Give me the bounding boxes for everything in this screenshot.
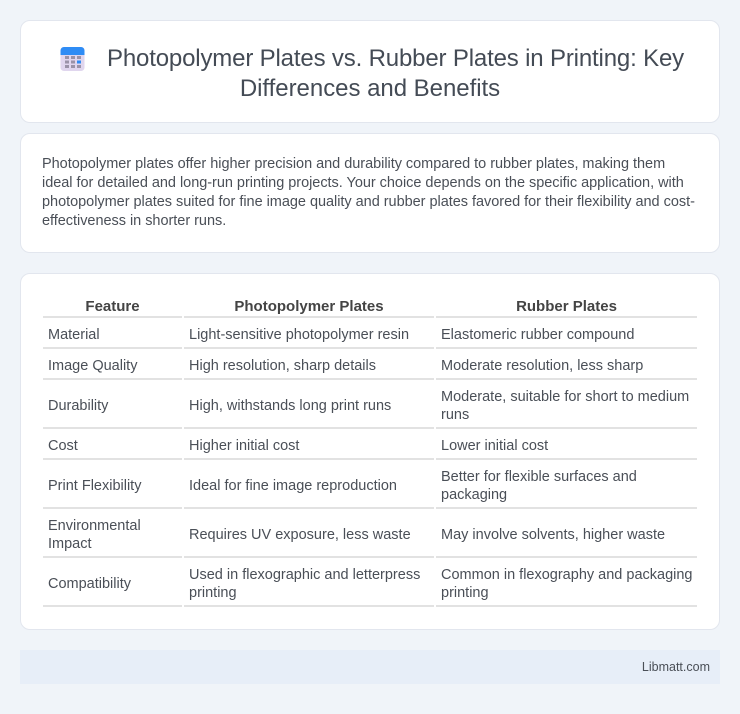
title: Photopolymer Plates vs. Rubber Plates in Printing: Key <box>107 45 684 72</box>
table rows: Durability <box>48 398 108 414</box>
icon: calendar <box>60 47 84 71</box>
table header: Feature <box>85 298 140 315</box>
intro text: Photopolymer plates offer higher precision and durability compared to rubber plates, making them <box>42 156 665 172</box>
table rows: High resolution, sharp details <box>189 358 376 374</box>
table header <box>43 298 697 318</box>
intro text <box>42 156 695 229</box>
table rows: May involve solvents, higher waste <box>441 527 665 543</box>
table rows: Requires UV exposure, less waste <box>189 527 411 543</box>
table rows: Moderate, suitable for short to medium <box>441 389 689 405</box>
table rows: Impact <box>48 536 92 552</box>
table rows: Print Flexibility <box>48 478 141 494</box>
panel: introduction <box>20 133 720 253</box>
comparison table <box>43 298 697 607</box>
footer bar <box>20 650 720 684</box>
table rows: Lower initial cost <box>441 438 548 454</box>
table header: Rubber Plates <box>516 298 617 315</box>
table rows: Common in flexography and packaging <box>441 567 692 583</box>
title: Differences and Benefits <box>240 75 500 102</box>
table rows: printing <box>441 585 489 601</box>
table rows: Image Quality <box>48 358 137 374</box>
table rows: Moderate resolution, less sharp <box>441 358 643 374</box>
table rows: High, withstands long print runs <box>189 398 391 414</box>
table rows: Ideal for fine image reproduction <box>189 478 397 494</box>
table rows: Higher initial cost <box>189 438 299 454</box>
table rows: runs <box>441 407 469 423</box>
table rows: printing <box>189 585 237 601</box>
table rows: Used in flexographic and letterpress <box>189 567 420 583</box>
table rows: packaging <box>441 487 507 503</box>
title <box>107 45 684 102</box>
footer text: Libmatt.com <box>642 660 710 674</box>
table rows: Light-sensitive photopolymer resin <box>189 327 409 343</box>
intro text: effectiveness in shorter runs. <box>42 213 226 229</box>
table rows: Material <box>48 327 100 343</box>
table rows: Compatibility <box>48 576 131 592</box>
intro text: photopolymer plates suited for fine image quality and rubber plates favored for their flexibility and cost- <box>42 194 695 210</box>
table rows: Environmental <box>48 518 141 534</box>
panel: comparison table <box>20 273 720 630</box>
panel: title card <box>20 20 720 123</box>
intro text: ideal for detailed and long-run printing projects. Your choice depends on the specific application, with <box>42 175 684 191</box>
table rows: Better for flexible surfaces and <box>441 469 637 485</box>
table rows: Cost <box>48 438 78 454</box>
table header: Photopolymer Plates <box>234 298 384 315</box>
table rows: Elastomeric rubber compound <box>441 327 634 343</box>
